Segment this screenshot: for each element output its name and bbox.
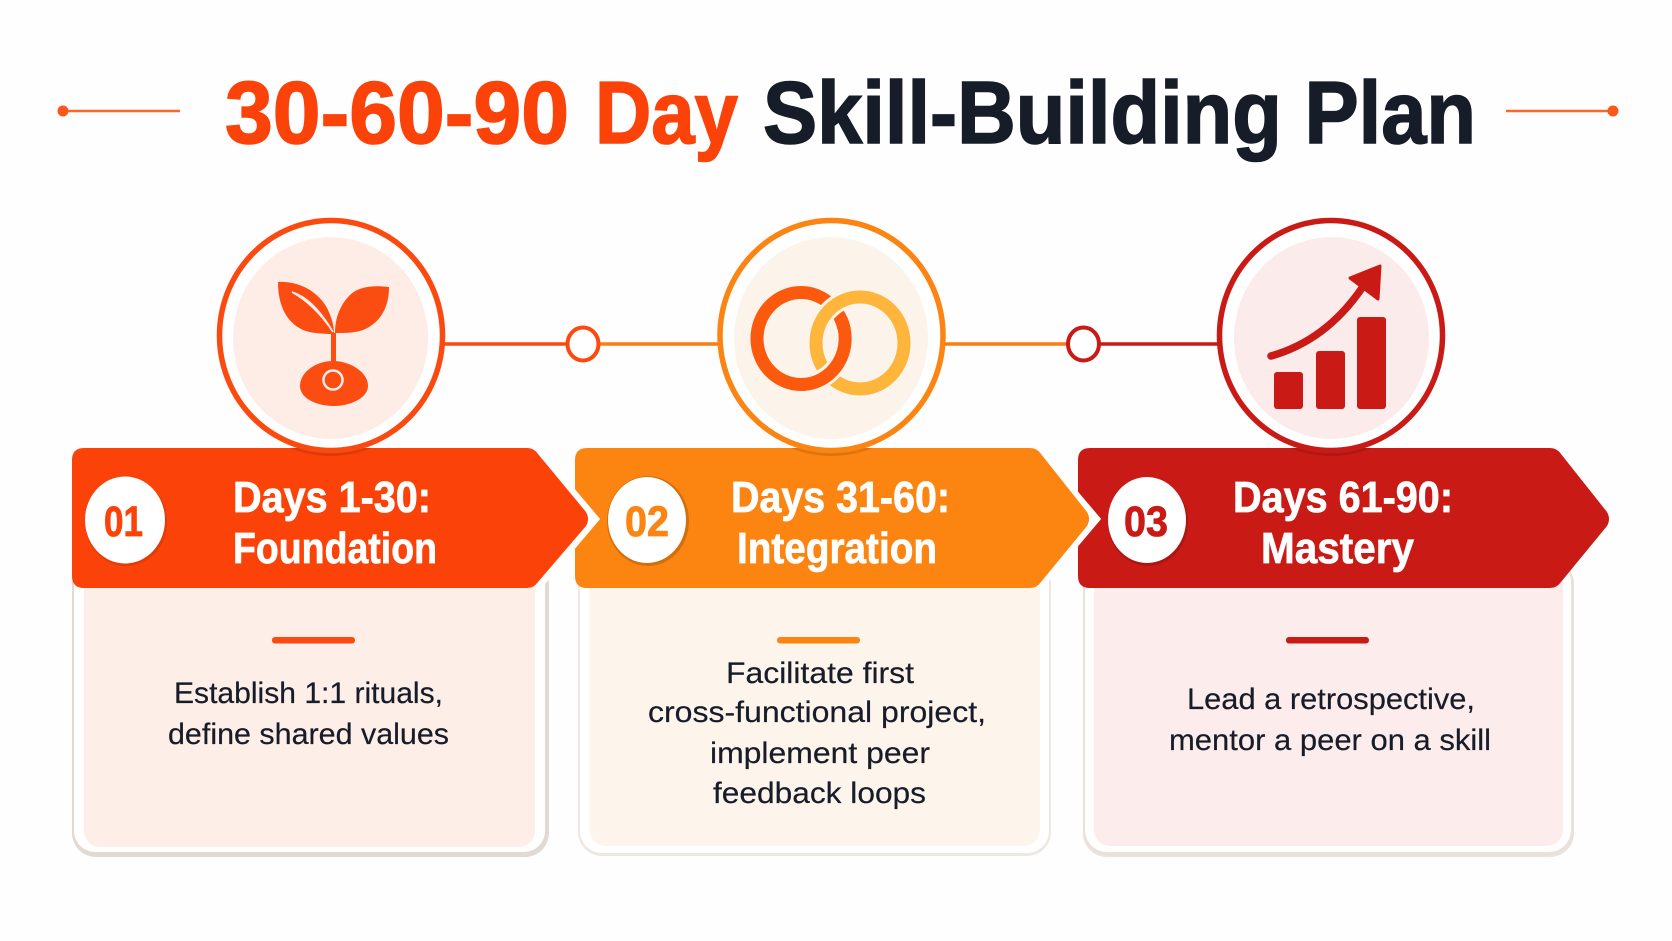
body text: step 1 bbox=[168, 677, 449, 751]
header text: step 3 bbox=[1233, 473, 1453, 573]
header text: step 1 bbox=[233, 473, 437, 573]
header text: step 1: Foundation bbox=[233, 524, 437, 573]
title accent right bbox=[1506, 106, 1618, 116]
header text: step 3: Days 61-90: bbox=[1233, 473, 1453, 522]
title bbox=[58, 63, 1618, 162]
title text dark: Skill-Building Plan bbox=[763, 63, 1476, 162]
badge: 02: 02 bbox=[625, 498, 669, 546]
circle icon: step 2 bbox=[720, 220, 943, 456]
badge: 01: 01 bbox=[104, 498, 143, 546]
badge: 01 bbox=[85, 476, 167, 566]
header text: step 2 bbox=[731, 473, 950, 573]
circle icon: step 1 bbox=[220, 220, 442, 456]
header text: step 1: Days 1-30: bbox=[233, 473, 431, 522]
header arrow: step 1 bbox=[72, 448, 589, 588]
card: step 2 bbox=[578, 560, 1051, 856]
icon: interlocking rings bbox=[757, 292, 904, 389]
body text: step 2: feedback loops bbox=[713, 777, 926, 810]
header text: step 2: Days 31-60: bbox=[731, 473, 950, 522]
title text numbers: 30-60-90 bbox=[225, 63, 569, 162]
header arrow: step 3 bbox=[1078, 448, 1609, 588]
body text: step 3: mentor a peer on a skill bbox=[1169, 724, 1491, 757]
body text: step 2: implement peer bbox=[710, 737, 930, 770]
icon: bar chart with arrow bbox=[1271, 266, 1386, 409]
body text: step 2 bbox=[648, 657, 986, 810]
header text: step 3: Mastery bbox=[1261, 524, 1414, 573]
panel: step 3 mastery bbox=[1078, 220, 1609, 857]
connector: step 1 to step 2 bbox=[440, 328, 722, 360]
icon: sprout and seed bbox=[278, 282, 389, 406]
card: step 3 bbox=[1083, 560, 1574, 857]
circle icon: step 3 bbox=[1220, 220, 1442, 456]
connector: step 2 to step 3 bbox=[942, 328, 1222, 360]
infographic: 30-60-90 day plan bbox=[58, 78, 1618, 857]
body text: step 3: Lead a retrospective, bbox=[1187, 683, 1475, 716]
body text: step 2: cross-functional project, bbox=[648, 696, 986, 729]
panel: step 1 foundation bbox=[72, 220, 589, 857]
badge: 03: 03 bbox=[1124, 498, 1168, 546]
panel: step 2 integration bbox=[575, 220, 1090, 856]
card: step 1 bbox=[72, 560, 549, 857]
body text: step 1: Establish 1:1 rituals, bbox=[174, 677, 443, 710]
header arrow: step 2 bbox=[575, 448, 1090, 588]
badge: 03 bbox=[1108, 477, 1188, 566]
title text day: Day bbox=[595, 63, 738, 162]
badge: 02 bbox=[607, 476, 689, 566]
title accent left bbox=[58, 106, 180, 116]
body text: step 3 bbox=[1169, 683, 1491, 757]
header text: step 2: Integration bbox=[737, 524, 937, 573]
body text: step 1: define shared values bbox=[168, 718, 449, 751]
body text: step 2: Facilitate first bbox=[726, 657, 915, 690]
